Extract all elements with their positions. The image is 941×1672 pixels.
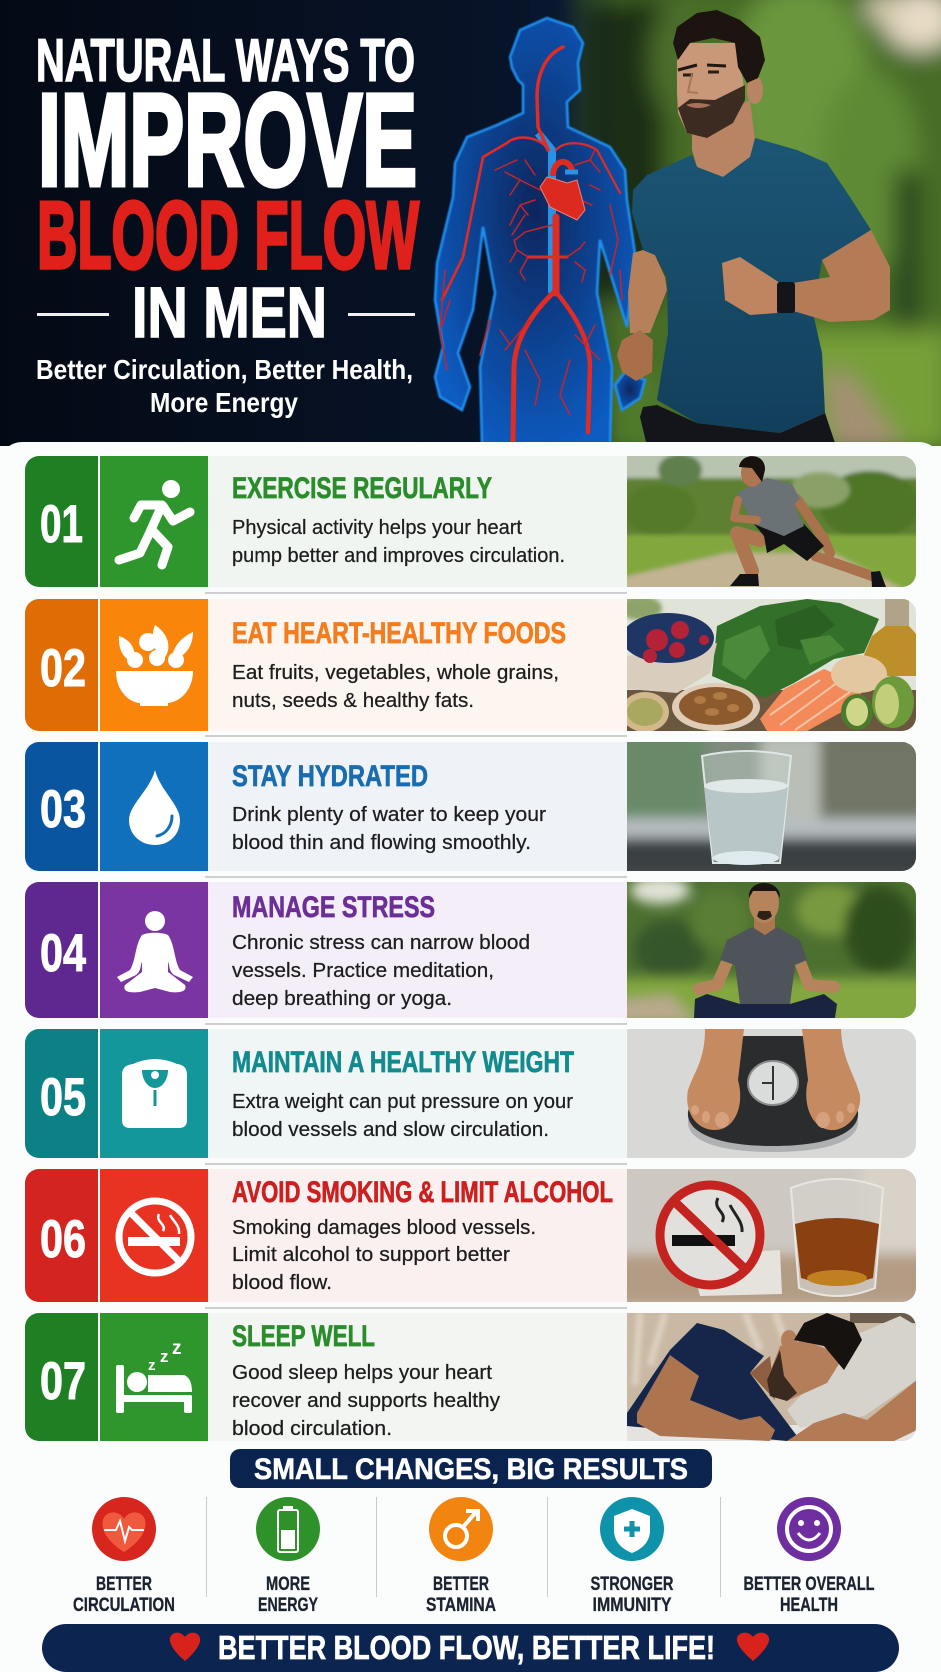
benefit: better stamina: BETTER bbox=[433, 1574, 489, 1595]
neck bbox=[750, 1356, 775, 1400]
subtitle bbox=[36, 354, 413, 418]
subtitle: Better Circulation, Better Health, bbox=[36, 354, 413, 385]
right leg bbox=[797, 499, 872, 576]
shorts bbox=[640, 405, 835, 442]
photo: glass of water bbox=[610, 735, 930, 878]
icon: shield bbox=[600, 1497, 664, 1561]
description: Chronic stress can narrow blood bbox=[232, 931, 530, 954]
ear bbox=[781, 1330, 797, 1350]
heading: MANAGE STRESS bbox=[232, 891, 435, 924]
fist bbox=[722, 257, 780, 315]
description: blood flow. bbox=[232, 1271, 332, 1294]
row 07: sleep well bbox=[25, 1313, 917, 1441]
title: BLOOD FLOW bbox=[37, 182, 419, 289]
icon: weighing scale bbox=[122, 1059, 187, 1128]
icon: food bowl bbox=[116, 625, 193, 706]
row 04: manage stress bbox=[25, 876, 930, 1028]
title bbox=[36, 27, 419, 353]
description: blood thin and flowing smoothly. bbox=[232, 831, 531, 854]
shorts bbox=[754, 524, 824, 561]
photo: jogging man bbox=[617, 10, 890, 446]
description bbox=[232, 1090, 573, 1141]
benefit: better circulation: CIRCULATION bbox=[73, 1595, 175, 1616]
description: Extra weight can put pressure on your bbox=[232, 1090, 573, 1113]
shirt bbox=[627, 1323, 797, 1441]
berry bowl bbox=[627, 643, 717, 693]
other arm bbox=[787, 1380, 917, 1441]
description: Physical activity helps your heart bbox=[232, 516, 522, 539]
description: pump better and improves circulation. bbox=[232, 544, 565, 567]
photo: man meditating bbox=[610, 876, 930, 1028]
description: vessels. Practice meditation, bbox=[232, 959, 494, 982]
benefit: more energy: MORE bbox=[266, 1574, 310, 1595]
t-shirt bbox=[632, 138, 871, 433]
icon: person in bed with zzz: z bbox=[160, 1347, 168, 1366]
icon: meditation bbox=[117, 911, 193, 992]
nuts bowl bbox=[672, 683, 760, 731]
shoes bbox=[730, 574, 759, 586]
heading: SLEEP WELL bbox=[232, 1320, 375, 1353]
forearm bbox=[734, 500, 757, 520]
description: Limit alcohol to support better bbox=[232, 1243, 510, 1266]
header banner bbox=[0, 0, 941, 460]
number: 03 bbox=[40, 780, 86, 839]
avocado bbox=[831, 655, 887, 693]
seeds bowl bbox=[627, 692, 669, 731]
nose bbox=[688, 74, 698, 93]
benefit: better stamina bbox=[426, 1497, 496, 1616]
description: Drink plenty of water to keep your bbox=[232, 803, 546, 826]
number: 01 bbox=[40, 495, 83, 554]
description: Good sleep helps your heart bbox=[232, 1361, 492, 1384]
heading: EAT HEART-HEALTHY FOODS bbox=[232, 617, 566, 650]
arms bbox=[699, 962, 834, 989]
row 06: avoid smoking and limit alcohol bbox=[25, 1160, 930, 1305]
number: 02 bbox=[40, 639, 86, 698]
icon: battery bbox=[256, 1497, 320, 1561]
number: 06 bbox=[40, 1210, 86, 1269]
left hand bbox=[617, 330, 653, 381]
salmon bbox=[760, 669, 867, 731]
title: IN MEN bbox=[132, 274, 327, 353]
icon: runner bbox=[119, 480, 190, 565]
title: NATURAL WAYS TO bbox=[36, 27, 415, 94]
number: 07 bbox=[40, 1352, 86, 1411]
row 05: maintain a healthy weight bbox=[25, 1029, 916, 1158]
description: Eat fruits, vegetables, whole grains, bbox=[232, 661, 559, 684]
arm bbox=[637, 1355, 775, 1441]
park background photo bbox=[562, 0, 941, 446]
pillow bbox=[787, 1316, 917, 1428]
description: deep breathing or yoga. bbox=[232, 987, 452, 1010]
description bbox=[232, 1361, 501, 1440]
shirt bbox=[737, 478, 804, 536]
benefit: better circulation bbox=[73, 1497, 175, 1616]
icon: person in bed with zzz: z bbox=[172, 1338, 182, 1359]
legs bbox=[694, 994, 837, 1018]
icon: heart with pulse bbox=[92, 1497, 156, 1561]
head bbox=[741, 467, 761, 487]
head bbox=[749, 883, 779, 923]
description bbox=[232, 516, 565, 567]
footer pill: better blood flow, better life bbox=[42, 1624, 899, 1672]
description bbox=[232, 803, 546, 854]
benefit: better circulation: BETTER bbox=[96, 1574, 152, 1595]
benefit: better overall health: BETTER OVERALL bbox=[744, 1574, 875, 1595]
photo: feet on scale bbox=[627, 1029, 916, 1158]
icon: smiley bbox=[777, 1497, 841, 1561]
icon: right heart bbox=[737, 1633, 769, 1661]
icon: person in bed with zzz: z bbox=[148, 1357, 156, 1374]
mouth bbox=[686, 103, 711, 108]
icon: left heart bbox=[170, 1633, 200, 1661]
benefit: more energy: ENERGY bbox=[258, 1595, 318, 1616]
hair bbox=[794, 1313, 862, 1370]
banner: small changes, big results: SMALL CHANGES, BIG RESULTS bbox=[254, 1453, 688, 1486]
ear bbox=[747, 76, 763, 104]
description: blood vessels and slow circulation. bbox=[232, 1118, 549, 1141]
shirt bbox=[720, 927, 807, 1004]
benefit: better overall health bbox=[744, 1497, 875, 1616]
benefit: better overall health: HEALTH bbox=[780, 1595, 838, 1616]
face bbox=[767, 1340, 844, 1401]
photo: healthy foods bbox=[618, 596, 917, 732]
description: recover and supports healthy bbox=[232, 1389, 501, 1412]
description: nuts, seeds & healthy fats. bbox=[232, 689, 474, 712]
benefit: more energy bbox=[256, 1497, 320, 1616]
watch bbox=[777, 282, 795, 313]
icon: person in bed with zzz bbox=[116, 1338, 192, 1413]
neck bbox=[692, 100, 755, 177]
description bbox=[232, 661, 559, 712]
number: 05 bbox=[40, 1068, 86, 1127]
oil bottle bbox=[864, 599, 917, 676]
subtitle: More Energy bbox=[150, 387, 298, 418]
heading: STAY HYDRATED bbox=[232, 760, 428, 793]
icon: water drop bbox=[129, 770, 180, 845]
heading: EXERCISE REGULARLY bbox=[232, 472, 492, 505]
left leg bbox=[737, 533, 760, 571]
benefit: better stamina: STAMINA bbox=[426, 1595, 496, 1616]
eyes and brows bbox=[678, 65, 726, 70]
benefit: stronger immunity: IMMUNITY bbox=[592, 1595, 672, 1616]
photo: man stretching outdoors bbox=[620, 450, 920, 590]
greens bbox=[712, 599, 879, 698]
photo: no smoking sign and whisky glass bbox=[610, 1160, 930, 1305]
beard bbox=[678, 85, 745, 138]
row 03: stay hydrated bbox=[25, 735, 930, 878]
description: blood circulation. bbox=[232, 1417, 392, 1440]
title: IMPROVE bbox=[38, 66, 417, 213]
white content panel bbox=[0, 442, 941, 1672]
beard bbox=[767, 1350, 797, 1401]
hair bbox=[673, 10, 765, 83]
face bbox=[677, 43, 745, 138]
footer pill: better blood flow, better life: BETTER BLOOD FLOW, BETTER LIFE! bbox=[218, 1629, 715, 1666]
description: Smoking damages blood vessels. bbox=[232, 1216, 536, 1239]
icon: no smoking bbox=[119, 1201, 191, 1273]
neck bbox=[754, 912, 775, 936]
right arm bbox=[790, 230, 890, 322]
row 01: exercise regularly bbox=[25, 450, 920, 590]
heart bbox=[540, 162, 585, 220]
illustration: circulatory system body bbox=[435, 18, 645, 446]
icon: male symbol bbox=[429, 1497, 493, 1561]
description bbox=[232, 1216, 536, 1294]
row 02: eat heart-healthy foods bbox=[25, 596, 917, 732]
benefit: stronger immunity: STRONGER bbox=[590, 1574, 674, 1595]
number: 04 bbox=[40, 924, 86, 983]
left arm bbox=[628, 250, 667, 333]
photo: man sleeping bbox=[627, 1313, 917, 1441]
heading: AVOID SMOKING & LIMIT ALCOHOL bbox=[232, 1176, 613, 1209]
heading: MAINTAIN A HEALTHY WEIGHT bbox=[232, 1046, 574, 1079]
benefit: stronger immunity bbox=[590, 1497, 674, 1616]
description bbox=[232, 931, 530, 1010]
